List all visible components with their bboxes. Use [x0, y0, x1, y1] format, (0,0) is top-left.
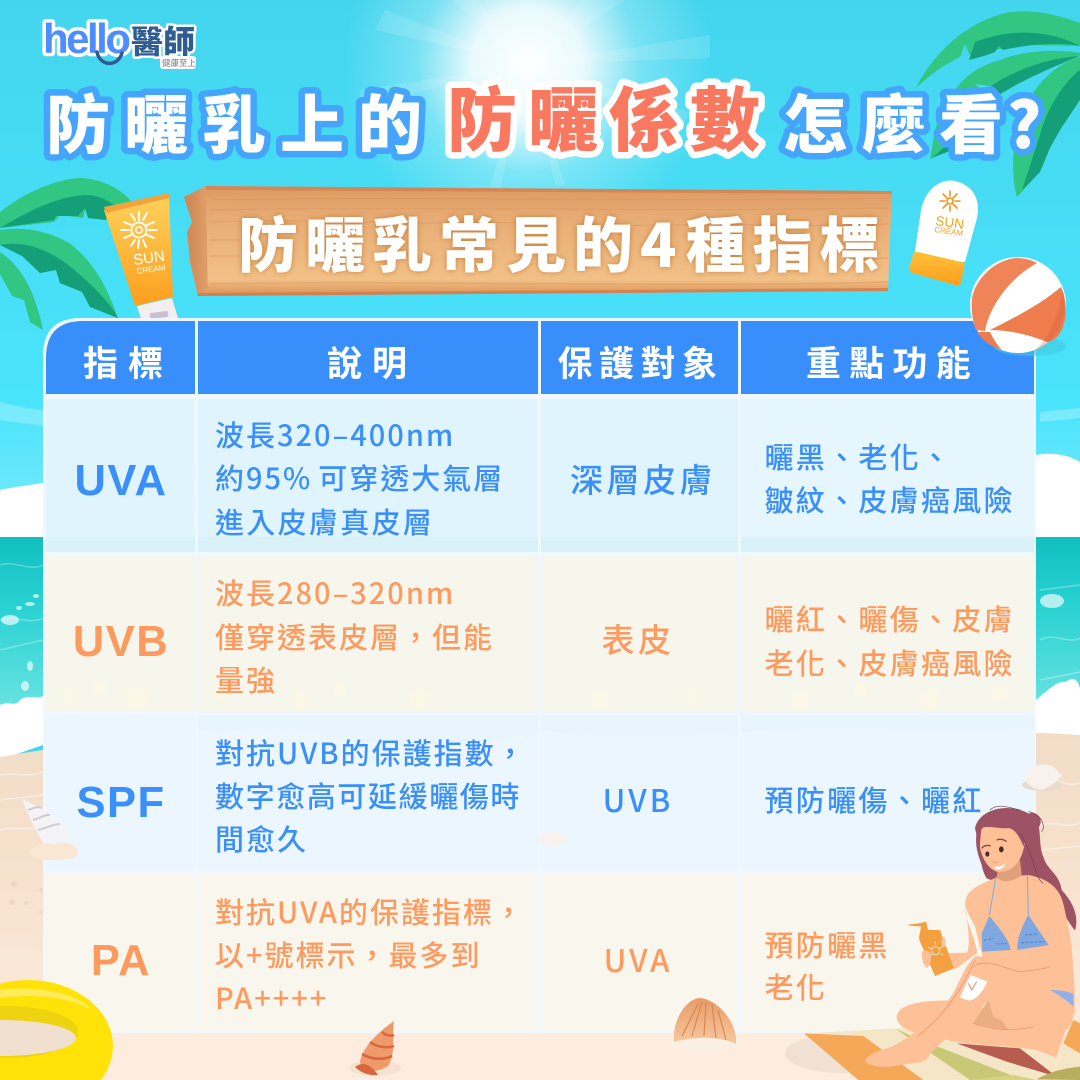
table header row: 保護對象	[557, 336, 724, 387]
row: PA: UVA	[604, 936, 672, 981]
holding arm	[937, 902, 977, 968]
row: SPF	[46, 715, 1034, 870]
illustration: woman applying sunscreen on beach towel	[785, 806, 1080, 1080]
row: UVB: UVB	[73, 618, 169, 666]
sign heading shadow: 防曬乳常見的4種指標	[238, 198, 887, 285]
row: SPF: SPF	[76, 779, 166, 827]
sun glow	[343, 0, 713, 249]
icon: white sunscreen bottle: CREAM	[934, 225, 964, 238]
row: SPF: UVB	[603, 776, 673, 821]
row: PA: PA++++	[215, 976, 328, 1018]
fingers on the bottle	[922, 936, 945, 968]
table frame	[43, 318, 1036, 1033]
row: SPF: 對抗UVB的保護指數，	[215, 731, 527, 773]
row: UVA: 約95%可穿透大氣層	[215, 456, 504, 498]
logo: hello 醫師: 醫師	[131, 17, 195, 63]
icon: faint shell under table	[537, 832, 568, 846]
title part: blue outlined end: 怎麼看?	[783, 75, 1055, 167]
row: UVB: 量強	[215, 658, 277, 700]
row: UVB	[46, 555, 1034, 712]
icon: fan shell	[669, 998, 741, 1053]
row: UVB: 波長280–320nm	[215, 571, 455, 613]
data table	[43, 318, 1036, 1033]
bikini top	[982, 875, 1049, 952]
table header row: 指標	[83, 336, 173, 387]
row: UVB: 老化、皮膚癌風險	[764, 641, 1015, 683]
icon: yellow swim ring	[0, 980, 113, 1080]
logo: hello 醫師: hello	[43, 15, 130, 62]
front leg	[865, 956, 1075, 1067]
row: SPF: 數字愈高可延緩曬傷時	[215, 774, 521, 816]
logo: hello 醫師: 健康至上	[162, 57, 197, 69]
row: UVB: 僅穿透表皮層，但能	[215, 615, 494, 657]
row: UVA	[46, 399, 1034, 552]
hair front and bun	[976, 806, 1043, 883]
icon: orange sunscreen tube	[104, 193, 178, 322]
icon: orange sunscreen tube: CREAM	[136, 263, 166, 276]
title	[46, 65, 1055, 167]
row: SPF: 間愈久	[215, 817, 308, 859]
row: UVA: 深層皮膚	[570, 454, 716, 502]
striped beach towel	[804, 1020, 1080, 1080]
row: UVB: 表皮	[602, 614, 674, 662]
torso	[965, 875, 1075, 1013]
row: UVA: 進入皮膚真皮層	[215, 500, 434, 542]
row: PA: 對抗UVA的保護指標，	[215, 890, 525, 932]
row: UVA: 皺紋、皮膚癌風險	[764, 478, 1015, 520]
applying arm	[974, 910, 1072, 987]
sign heading: 防曬乳常見的4種指標	[238, 198, 887, 285]
wooden sign	[184, 186, 892, 296]
row: PA: 以+號標示，最多到	[215, 933, 482, 975]
icon: white sunscreen bottle: SUN	[935, 213, 965, 232]
row: PA: 預防曬黑	[764, 923, 890, 965]
icon: white spiral shell	[22, 799, 78, 860]
table header row	[46, 321, 1034, 394]
row: UVA: 波長320–400nm	[215, 413, 455, 455]
row: UVA: 曬黑、老化、	[764, 435, 952, 477]
back hair	[975, 808, 1076, 931]
title part: blue outlined start: 防曬乳上的	[46, 75, 436, 167]
icon: top right sea shell	[1022, 764, 1062, 791]
row: PA	[46, 874, 1034, 1032]
icon: top left palm leaves	[0, 178, 132, 330]
neck	[997, 860, 1022, 881]
white sunscreen smear	[960, 975, 987, 1001]
row: SPF: 預防曬傷、曬紅	[764, 778, 984, 820]
facial features	[982, 839, 1007, 870]
icon: orange conch shell	[349, 1021, 401, 1076]
icon: white sunscreen bottle	[909, 181, 978, 285]
sunscreen bottle held by woman	[907, 921, 954, 976]
folded leg	[897, 1001, 1067, 1058]
row: PA: 老化	[764, 965, 827, 1007]
row: PA: PA	[91, 937, 151, 985]
bikini bottom	[1050, 990, 1073, 1007]
table header row: 說明	[327, 336, 417, 387]
face	[979, 821, 1025, 872]
logo: hello 醫師	[43, 15, 197, 69]
icon: beach ball	[970, 257, 1066, 356]
icon: orange sunscreen tube: SUN	[132, 248, 166, 269]
icon: top right palm leaves	[916, 11, 1080, 197]
row: UVA: UVA	[74, 457, 168, 505]
row: UVB: 曬紅、曬傷、皮膚	[764, 597, 1015, 639]
title part: highlighted words: 防曬係數	[447, 65, 771, 166]
table header row: 重點功能	[806, 336, 979, 387]
